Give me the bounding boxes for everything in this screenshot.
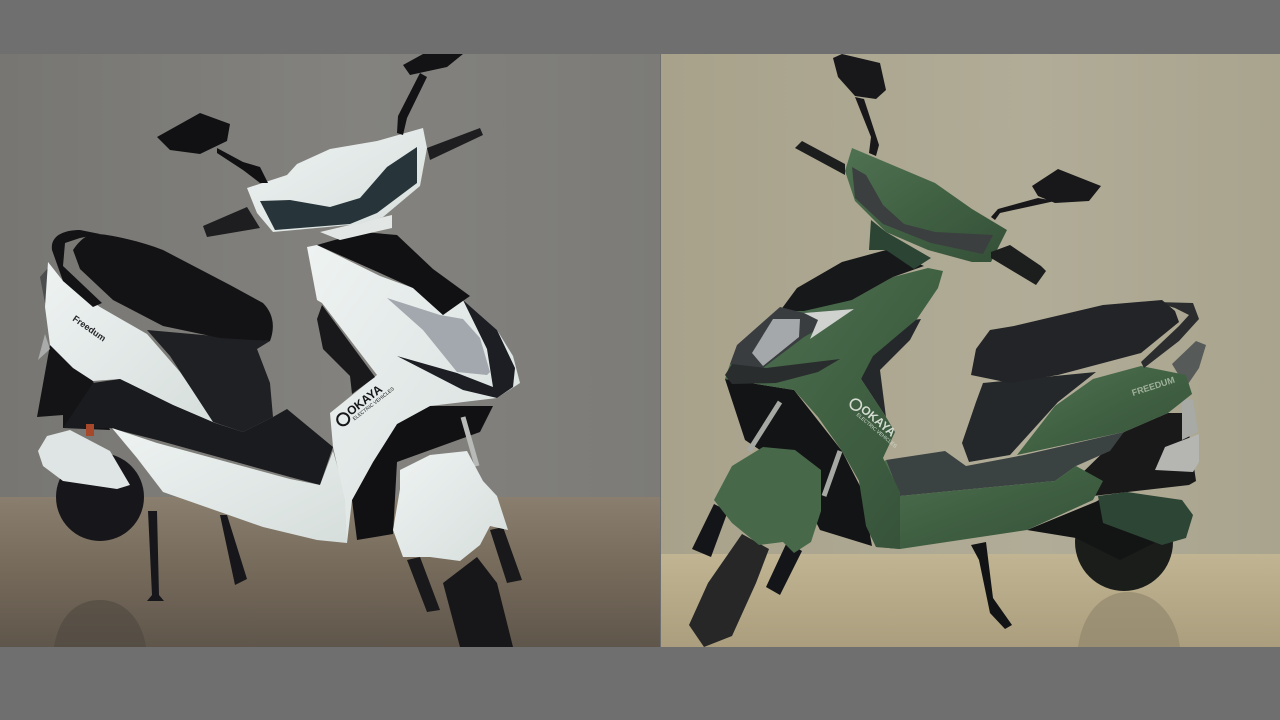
headlight chevron xyxy=(804,309,854,339)
seat xyxy=(73,234,273,341)
left mirror xyxy=(833,54,886,156)
seat grab rail xyxy=(52,230,102,307)
lower lamp strip xyxy=(725,359,840,384)
okaya logo xyxy=(333,376,396,431)
floor board xyxy=(886,432,1124,496)
left handlebar xyxy=(203,207,260,237)
battery cover xyxy=(38,430,130,489)
under-seat dark panel xyxy=(147,330,273,432)
floor reflection xyxy=(1078,592,1180,647)
front body xyxy=(725,268,943,549)
neck xyxy=(869,220,931,269)
tail lamp xyxy=(1172,341,1206,387)
headlight surround xyxy=(730,307,854,368)
bottom grey band xyxy=(0,647,1280,720)
left mirror xyxy=(157,113,268,183)
fork chrome xyxy=(463,417,477,466)
black nose xyxy=(317,232,470,315)
rear wheel xyxy=(56,453,144,541)
rear wheel xyxy=(1075,493,1173,591)
inner dark leg shield xyxy=(317,305,375,394)
black nose xyxy=(780,250,924,311)
front fender xyxy=(714,447,821,553)
front wheel xyxy=(443,557,513,647)
lower silver plate xyxy=(1155,434,1199,472)
headlight glass xyxy=(387,298,490,375)
seat xyxy=(971,300,1179,383)
rear dark frame xyxy=(1075,413,1196,496)
right mirror xyxy=(397,54,463,135)
right wall backdrop xyxy=(661,54,1280,554)
front wheel xyxy=(689,534,769,647)
headlight glass xyxy=(752,319,800,366)
fork chrome xyxy=(749,402,840,496)
right mirror xyxy=(991,169,1101,220)
fork legs xyxy=(692,504,802,595)
fork dark area xyxy=(725,379,872,546)
panel: green scooter photo xyxy=(661,54,1280,647)
floor reflection xyxy=(54,600,146,647)
headlight dark surround xyxy=(397,300,515,398)
left wall backdrop xyxy=(0,54,660,497)
number plate xyxy=(38,334,50,360)
right floor xyxy=(661,554,1280,647)
white scooter xyxy=(37,54,522,647)
handlebar head xyxy=(845,148,1007,262)
logo circle xyxy=(848,397,864,412)
logo wordmark: OKAYA xyxy=(858,402,899,440)
front fender xyxy=(393,451,508,561)
panel: white scooter photo xyxy=(0,54,660,647)
left handlebar xyxy=(795,141,845,175)
logo wordmark: OKAYA xyxy=(344,382,385,418)
tail light xyxy=(40,268,67,303)
under-seat panel xyxy=(962,372,1096,462)
logo tagline: ELECTRIC VEHICLES xyxy=(352,386,396,422)
floor board xyxy=(63,379,333,485)
swingarm xyxy=(1027,500,1160,560)
neck xyxy=(320,215,392,240)
fork legs xyxy=(407,527,522,612)
freedum side badge: FREEDUM xyxy=(1131,375,1176,398)
side panel xyxy=(1017,366,1192,455)
rear dark fairing xyxy=(37,345,110,430)
battery cover xyxy=(1098,492,1193,545)
okaya logo xyxy=(845,394,906,450)
orange shock spring xyxy=(86,424,94,436)
handlebar head xyxy=(247,128,427,232)
rear white panel xyxy=(45,262,215,423)
kick stand xyxy=(971,542,1012,629)
front apron xyxy=(307,245,520,543)
logo tagline: ELECTRIC VEHICLES xyxy=(855,412,898,450)
inner leg shield xyxy=(861,319,921,417)
right handlebar xyxy=(991,245,1046,285)
top grey band xyxy=(0,0,1280,54)
upper silver plate xyxy=(1182,398,1198,440)
headlamp visor xyxy=(852,167,993,254)
seat rail xyxy=(1141,302,1199,368)
front fork area xyxy=(352,406,493,540)
freedum side badge: Freedum xyxy=(71,313,108,343)
right handlebar xyxy=(427,128,483,160)
lower body xyxy=(859,460,1103,549)
left floor xyxy=(0,497,660,647)
headlamp visor xyxy=(260,147,417,230)
green scooter xyxy=(689,54,1206,647)
lower white body xyxy=(112,428,347,543)
logo circle xyxy=(335,411,352,428)
kick stand xyxy=(147,511,247,601)
